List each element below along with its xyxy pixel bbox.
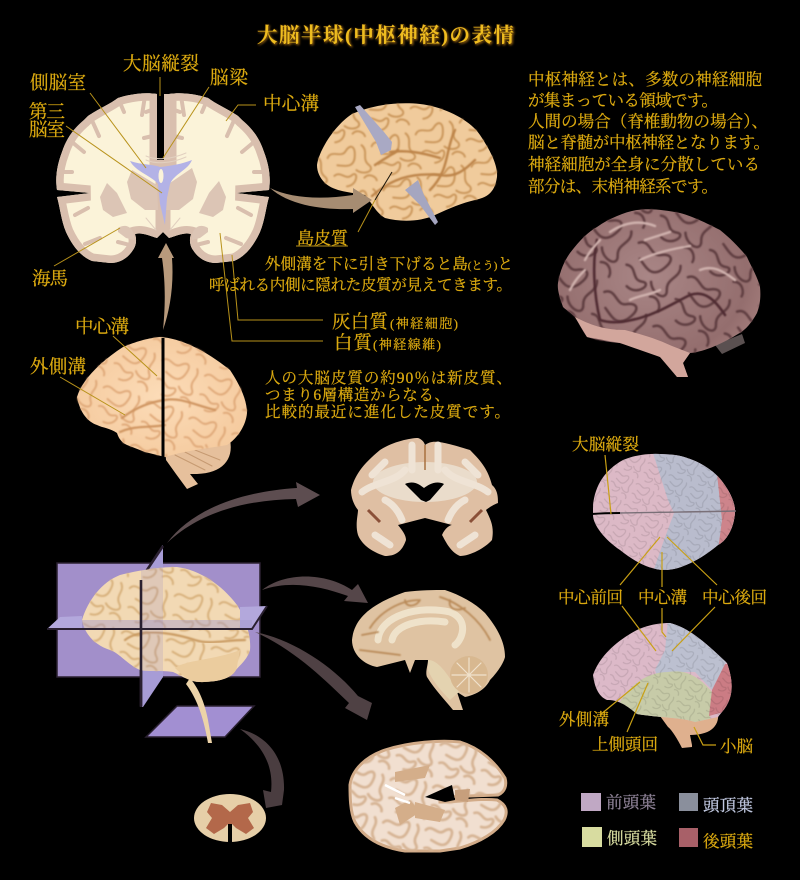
cerebral fissure [164, 94, 170, 160]
neocortex description: 人の大脳皮質の約90％は新皮質、 [265, 369, 512, 387]
arrow: coronal section to insula brain [270, 188, 372, 213]
brain coronal section diagram [56, 92, 270, 263]
label: 灰白質: 灰白質 [332, 312, 389, 333]
neocortex description: 比較的最近に進化した皮質です。 [265, 403, 510, 421]
central nervous system description: 中枢神経とは、多数の神経細胞 [528, 70, 762, 89]
insula brain illustration [317, 103, 497, 225]
label: 第三脳室: 脳室 [29, 120, 65, 141]
cerebellum edge [715, 334, 745, 354]
spinal cord cross section [194, 794, 266, 842]
neocortex description: つまり6層構造からなる、 [265, 386, 450, 404]
legend: temporal lobe: 側頭葉 [607, 829, 657, 848]
legend: frontal lobe: 前頭葉 [606, 793, 656, 812]
central nervous system description: が集まっている領域です。 [528, 91, 718, 110]
label: 大脳縦裂 right: 大脳縦裂 [572, 435, 639, 454]
label: 中心溝 right: 中心溝 [638, 588, 688, 607]
horizontal plane [47, 606, 267, 629]
label: 海馬: 海馬 [32, 269, 68, 290]
sagittal slice photo [352, 590, 505, 710]
legend: temporal lobe [582, 827, 657, 848]
lateral brain illustration [77, 337, 247, 489]
arrow to sagittal slice [262, 576, 368, 603]
section plane brain diagram [47, 545, 267, 743]
retractor upper [355, 105, 392, 155]
label: 外側溝: 外側溝 [30, 357, 86, 378]
title: 大脳半球(中枢神経)の表情 [257, 23, 514, 47]
hippocampus fold and callosum [146, 153, 186, 230]
central nervous system description: 人間の場合（脊椎動物の場合）、 [528, 112, 768, 131]
central nervous system description: 部分は、末梢神経系です。 [528, 177, 718, 196]
insula description: 呼ばれる内側に隠れた皮質が見えてきます。 [209, 276, 512, 294]
label: 脳梁: 脳梁 [210, 67, 249, 89]
legend [581, 793, 753, 851]
pointers for lateral brain [60, 336, 157, 415]
label: 第三脳室 [29, 102, 65, 141]
arrow to horizontal slice [255, 632, 372, 720]
legend: parietal lobe [679, 793, 753, 815]
ventricle cavities [405, 483, 444, 502]
side view brain lobes [593, 620, 740, 748]
central nervous system description [528, 70, 770, 196]
arrow: lateral brain to coronal section [158, 243, 174, 330]
coronal plane [57, 563, 260, 677]
cortex pointers [54, 77, 392, 341]
label: 外側溝 right: 外側溝 [559, 710, 610, 729]
cerebellum and brainstem [165, 440, 231, 489]
label: 中心溝 lateral: 中心溝 [75, 317, 129, 338]
insula description: 外側溝を下に引き下げると島(とう)と [265, 255, 513, 273]
sagittal plane [140, 545, 163, 707]
brain with section planes [82, 567, 250, 682]
label: 第三脳室: 第三 [29, 102, 65, 123]
label: 上側頭回: 上側頭回 [592, 735, 658, 754]
lower horizontal plane [146, 706, 254, 737]
insula description [209, 255, 513, 294]
label: 神経細胞: (神経細胞) [390, 316, 458, 331]
underside pink [575, 317, 690, 377]
central nervous system description: 脳と脊髄が中枢神経となります。 [528, 133, 770, 152]
arrow to spinal cord slice [240, 729, 284, 808]
spinal cord stem [186, 678, 212, 743]
coronal slice photo [351, 438, 498, 556]
label: 白質: 白質 [334, 333, 373, 354]
label: 中心前回: 中心前回 [558, 588, 623, 607]
top view brain lobes [593, 454, 736, 570]
cerebellum [660, 712, 718, 748]
lateral and third ventricles [130, 160, 192, 225]
label: 神経線維: (神経線維) [373, 337, 441, 352]
label: 小脳: 小脳 [720, 737, 753, 756]
legend: occipital lobe: 後頭葉 [703, 832, 753, 851]
arrow to coronal slice [167, 482, 320, 543]
retractor lower [405, 180, 438, 225]
legend: parietal lobe: 頭頂葉 [703, 796, 753, 815]
label: 中心溝: 中心溝 [263, 94, 319, 115]
horizontal slice photo [350, 741, 506, 851]
pointers for lobe brains [600, 455, 717, 745]
label: 側脳室: 側脳室 [30, 73, 86, 94]
label: 中心後回: 中心後回 [702, 588, 767, 607]
legend: occipital lobe [679, 828, 753, 851]
label: 大脳縦裂: 大脳縦裂 [123, 54, 199, 75]
incision line [162, 338, 164, 471]
central nervous system description: 神経細胞が全身に分散している [528, 155, 760, 174]
label: 島皮質: 島皮質 [297, 229, 349, 248]
real brain photo [558, 209, 760, 377]
legend: frontal lobe [581, 793, 656, 812]
neocortex description [265, 369, 512, 421]
basal ganglia [100, 168, 226, 240]
